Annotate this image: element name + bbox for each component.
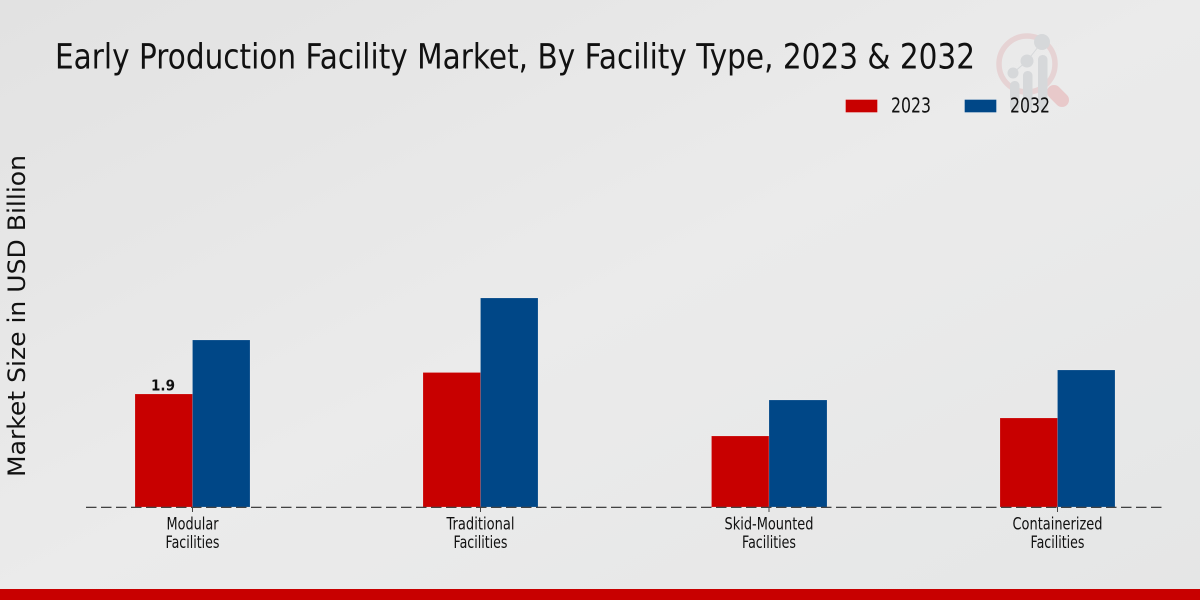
bar chart — [135, 298, 1115, 507]
x axis baseline — [86, 507, 1164, 512]
group: Traditional Facilities — [423, 298, 538, 507]
label: Traditional Facilities: Traditional — [446, 514, 514, 534]
group: Skid-Mounted Facilities — [712, 400, 827, 507]
bottom bar — [0, 589, 1200, 600]
legend: 2032: 2032 — [1010, 94, 1050, 118]
label: Modular Facilities: Facilities — [166, 533, 220, 552]
label: Containerized Facilities: Containerized — [1012, 514, 1102, 534]
title: Early Production Facility Market, By Facility Type, 2023 & 2032 — [55, 38, 975, 78]
group: Containerized Facilities — [1000, 370, 1115, 507]
legend: 2023 — [846, 94, 931, 118]
legend: 2023: 2023 — [891, 94, 931, 118]
label: Skid-Mounted Facilities: Facilities — [742, 533, 796, 552]
label: Skid-Mounted Facilities: Skid-Mounted — [724, 514, 814, 534]
label: Containerized Facilities: Facilities — [1030, 533, 1084, 552]
legend — [846, 94, 1050, 118]
y axis label: Market Size in USD Billion — [3, 155, 31, 477]
group: Modular Facilities — [135, 340, 250, 507]
label: Traditional Facilities: Facilities — [454, 533, 508, 552]
label: Modular Facilities: Modular — [166, 514, 219, 534]
x axis labels — [166, 514, 1102, 552]
legend: 2032 — [964, 94, 1050, 118]
value label: 1.9 — [151, 376, 175, 394]
watermark logo — [999, 34, 1062, 111]
